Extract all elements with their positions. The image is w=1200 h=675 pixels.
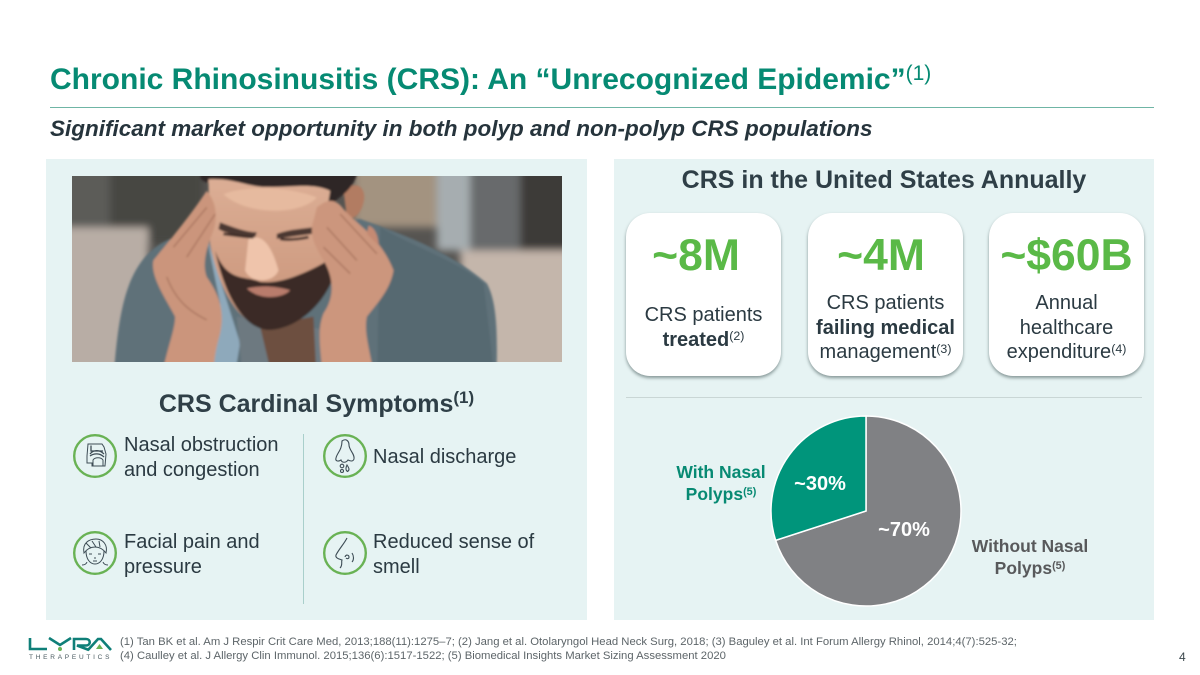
- icon: nasal obstruction: [73, 434, 117, 478]
- stats divider: [626, 397, 1142, 398]
- photo: man with headache: [72, 176, 562, 362]
- card: 8M: [626, 213, 781, 376]
- page number: 4: [1179, 650, 1186, 664]
- stat label: treated(2): [663, 328, 744, 350]
- logo: Lyra Therapeutics: [28, 636, 112, 661]
- stat label: [1007, 292, 1126, 363]
- beard: [215, 250, 334, 330]
- label: without polyps: Without Nasal: [972, 536, 1088, 556]
- icon: facial pain: [73, 531, 117, 575]
- column divider: [303, 434, 304, 604]
- face: [208, 179, 330, 328]
- shirt: [113, 219, 497, 383]
- footnotes: [120, 636, 1017, 662]
- stat value: ~$60B: [1000, 231, 1133, 280]
- icon: reduced smell: [323, 531, 367, 575]
- stat label: expenditure(4): [1007, 341, 1126, 363]
- footnotes: (1) Tan BK et al. Am J Respir Crit Care Med, 2013;188(11):1275–7; (2) Jang et al. Otolaryngol Head Neck Surg, 2018; (3) Baguley et al. Int Forum Allergy Rhinol, 2014;4(7):525-32;: [120, 636, 1017, 648]
- stat label: [645, 304, 762, 350]
- stat label: management(3): [820, 341, 951, 363]
- text: nasal discharge: Nasal discharge: [373, 446, 516, 468]
- text: nasal obstruction: Nasal obstruction: [124, 434, 279, 456]
- value: 70%: ~70%: [878, 519, 930, 541]
- subtitle: Significant market opportunity in both polyp and non-polyp CRS populations: [50, 116, 872, 141]
- text: facial pain: Facial pain and: [124, 531, 260, 553]
- text: reduced smell: Reduced sense of: [373, 531, 534, 553]
- label: with polyps: With Nasal: [676, 462, 766, 482]
- title rule: [50, 107, 1154, 108]
- label: without polyps: Polyps(5): [995, 558, 1065, 578]
- slice: without polyps: [776, 416, 961, 606]
- text: reduced smell: smell: [373, 556, 420, 578]
- text: nasal obstruction: and congestion: [124, 459, 260, 481]
- card: 60B: [989, 213, 1144, 376]
- label: with polyps: [676, 462, 766, 504]
- US annual heading: CRS in the United States Annually: [682, 166, 1086, 194]
- text: facial pain: [124, 531, 260, 578]
- ear: [344, 185, 364, 218]
- stat label: failing medical: [816, 316, 955, 338]
- stat label: [816, 292, 955, 363]
- stat value: ~8M: [652, 231, 740, 280]
- title: Chronic Rhinosinusitis (CRS): An “Unrecognized Epidemic”(1): [50, 62, 931, 96]
- logo: Lyra Therapeutics: THERAPEUTICS: [29, 654, 112, 661]
- right hand: [312, 201, 394, 383]
- label: with polyps: Polyps(5): [686, 484, 756, 504]
- stat label: Annual: [1035, 292, 1098, 314]
- value: 30%: ~30%: [794, 473, 846, 495]
- panel: US annual: [614, 159, 1154, 620]
- footnotes: (4) Caulley et al. J Allergy Clin Immunol. 2015;136(6):1517-1522; (5) Biomedical Insights Market Sizing Assessment 2020: [120, 650, 726, 662]
- stat label: CRS patients: [645, 304, 762, 326]
- brows and eyes: [218, 222, 257, 237]
- icon: nasal discharge: [323, 434, 367, 478]
- symptoms heading: CRS Cardinal Symptoms(1): [159, 388, 474, 418]
- left hand: [153, 191, 222, 383]
- stat label: CRS patients: [827, 292, 944, 314]
- card: 4M: [808, 213, 963, 376]
- slice: with polyps: [771, 416, 866, 540]
- text: reduced smell: [373, 531, 534, 578]
- panel: symptoms: [46, 159, 587, 620]
- text: nasal obstruction: [124, 434, 279, 481]
- stat value: ~4M: [837, 231, 925, 280]
- text: facial pain: pressure: [124, 556, 202, 578]
- stat label: healthcare: [1020, 316, 1113, 338]
- label: without polyps: [972, 536, 1088, 578]
- hair: [200, 168, 359, 202]
- pie chart: [770, 415, 962, 607]
